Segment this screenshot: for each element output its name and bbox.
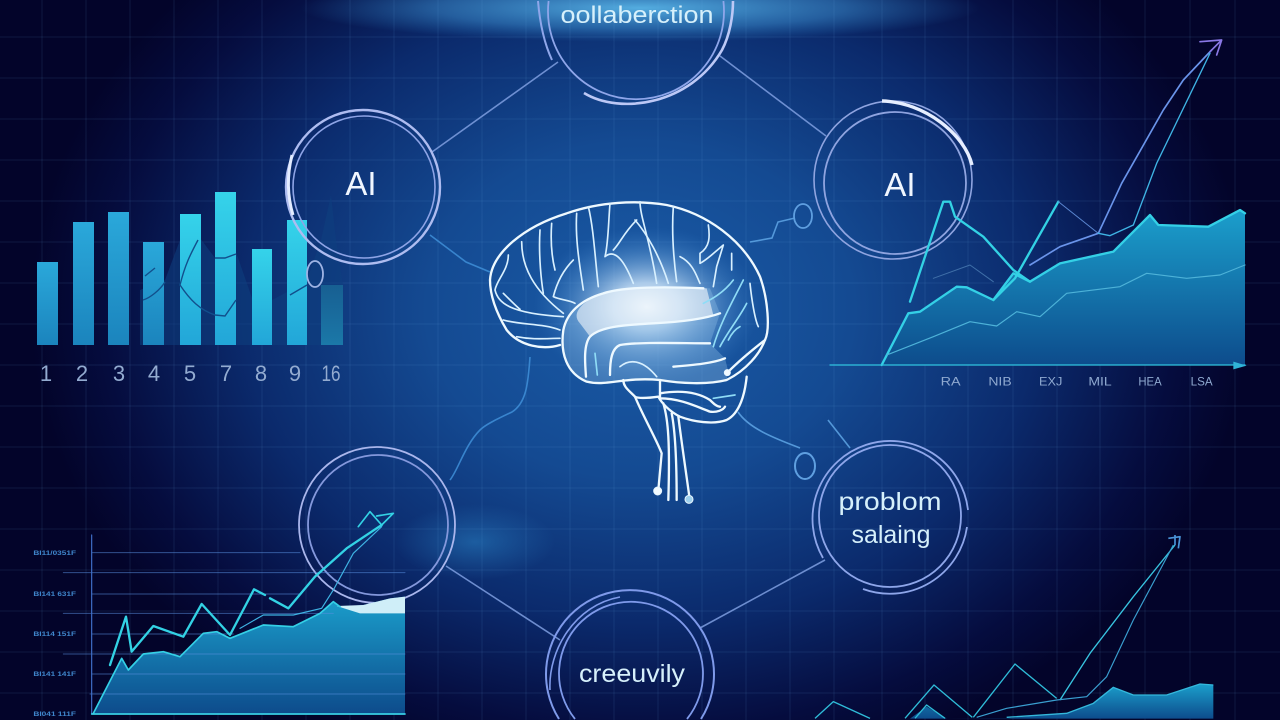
top right chart labels: HEA [1138, 374, 1162, 388]
label: AI: AI [345, 165, 377, 202]
bottom left axis labels: BI141 141F [33, 671, 76, 678]
node: collaboration [538, 1, 733, 104]
node: bottom left ring [299, 447, 455, 603]
cortex folds [495, 202, 758, 377]
top right chart labels: EXJ [1039, 374, 1062, 388]
bottom left axis labels: BI141 631F [33, 591, 76, 598]
area chart: bottom right [815, 535, 1213, 719]
bar axis labels: 5 [184, 361, 196, 386]
stem nodes [654, 370, 730, 503]
top right chart labels: NIB [988, 374, 1012, 388]
small ring right bottom [795, 453, 815, 479]
bar axis labels: 9 [289, 361, 301, 386]
bar axis labels [40, 361, 340, 386]
top right chart labels: RA [941, 374, 961, 388]
bar axis labels: 7 [220, 361, 232, 386]
brain outline [490, 202, 768, 500]
bar axis labels: 4 [148, 361, 160, 386]
area chart: top right [830, 40, 1247, 388]
label: solving: salaing [852, 521, 930, 549]
area chart: bottom left [33, 512, 405, 718]
label: collaboration: oollaberction [560, 2, 714, 29]
bar chart [37, 192, 343, 386]
top right chart labels: MIL [1088, 374, 1112, 388]
connector lines between nodes [430, 56, 850, 640]
bar axis labels: 16 [322, 361, 340, 386]
bottom left axis labels: BI114 151F [33, 631, 76, 638]
bar axis labels: 2 [76, 361, 88, 386]
bottom left axis labels: BI11/0351F [33, 550, 76, 557]
bottom left axis labels [33, 550, 76, 718]
bottom left axis labels: BI041 111F [33, 711, 76, 718]
node: AI left [286, 110, 440, 264]
node: AI right [814, 101, 972, 259]
bar axis labels: 1 [40, 361, 52, 386]
bar axis labels: 3 [113, 361, 125, 386]
small ring right top [794, 204, 812, 228]
small ring left [307, 261, 323, 287]
label: problem: problom [838, 488, 942, 516]
top right chart labels [941, 374, 1213, 388]
bar axis labels: 8 [255, 361, 267, 386]
label: AI: AI [884, 166, 916, 203]
top right chart labels: LSA [1191, 374, 1213, 388]
label: creativity: creeuvily [579, 660, 686, 688]
node: creativity [546, 590, 714, 719]
brain illustration [490, 202, 768, 503]
node: problem solving [813, 441, 968, 594]
